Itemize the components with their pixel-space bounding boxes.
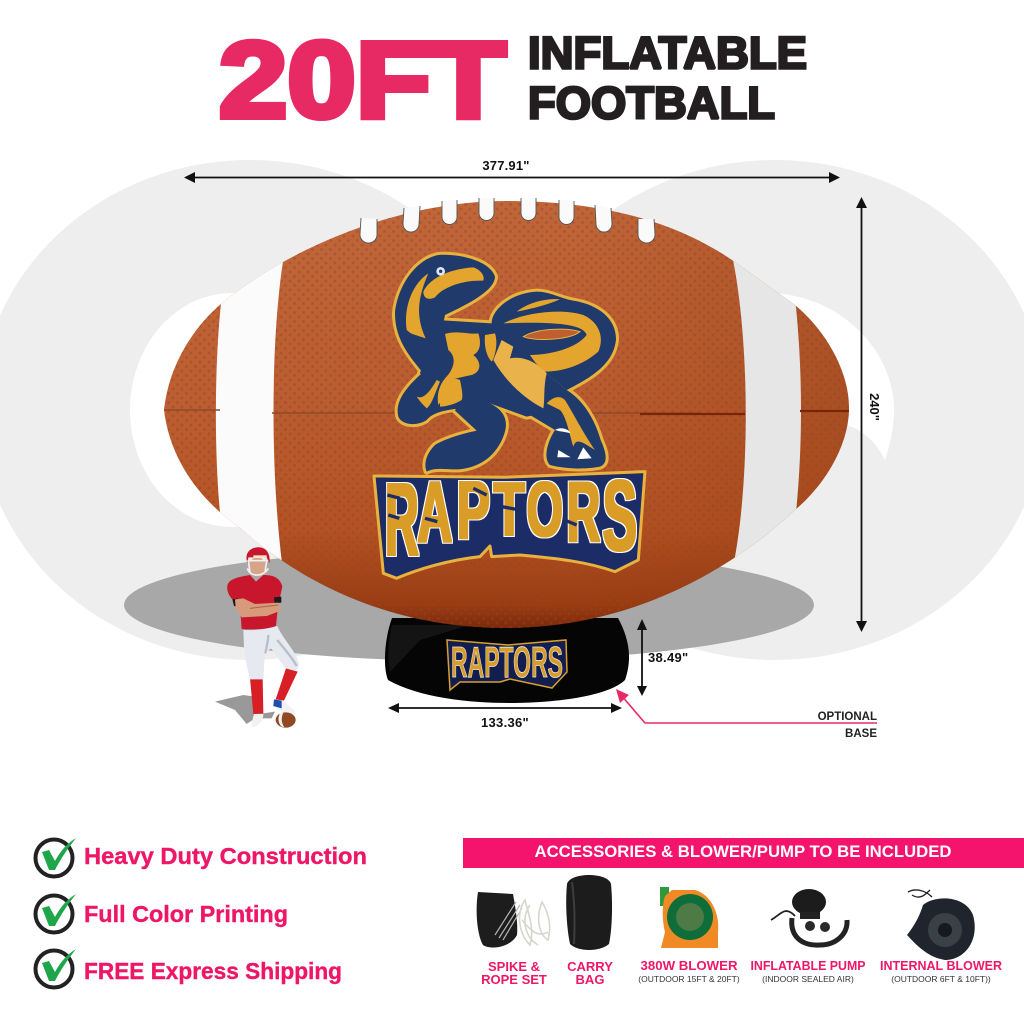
background ghost football [0, 160, 1024, 660]
raptors wordmark badge: R [385, 461, 419, 577]
feature: heavy duty construction [36, 838, 367, 876]
feature: free express shipping [36, 949, 342, 988]
head and helmet [249, 557, 265, 576]
icon: internal blower [907, 890, 975, 960]
player [215, 547, 299, 728]
accessory labels: ROPE SET [481, 972, 547, 987]
raptors wordmark badge: P [457, 466, 490, 556]
raptors wordmark badge: T [493, 467, 525, 551]
jersey [227, 575, 282, 629]
accessory labels: INTERNAL BLOWER [880, 958, 1003, 973]
base height dimension: 38.49" [648, 650, 688, 665]
accessory sublabels [638, 974, 991, 984]
accessories banner [463, 838, 1024, 868]
height dimension: 240" [867, 393, 882, 421]
feature: full color printing: Full Color Printing [84, 901, 288, 927]
accessory labels [481, 958, 1003, 987]
accessory labels: CARRY [567, 959, 613, 974]
optional base callout: OPTIONAL [818, 711, 877, 723]
accessory labels: SPIKE & [488, 959, 540, 974]
title: inflatable football: INFLATABLE [528, 28, 807, 78]
icon: inflatable pump [771, 889, 847, 945]
feature: heavy duty construction: Heavy Duty Construction [84, 843, 367, 869]
title: inflatable football: FOOTBALL [528, 78, 775, 128]
accessories panel [463, 838, 1024, 987]
width dimension: 377.91" [482, 158, 530, 173]
feature list [36, 838, 367, 988]
socks [250, 668, 298, 714]
title: inflatable football [528, 28, 807, 128]
raptors wordmark badge [374, 460, 645, 578]
width dimension [184, 158, 840, 183]
raptors wordmark badge: A [417, 463, 452, 560]
cleats [252, 714, 263, 727]
white band right [732, 255, 801, 562]
base width dimension: 133.36" [481, 715, 529, 730]
raptors wordmark badge: R [567, 465, 600, 560]
arms [235, 598, 281, 617]
accessory labels: INFLATABLE PUMP [750, 958, 866, 973]
football body [150, 190, 860, 640]
laces [360, 198, 655, 243]
optional base callout [616, 689, 877, 740]
base height dimension [637, 619, 688, 696]
white band left [216, 255, 284, 578]
icon: spike and rope set [477, 892, 550, 948]
base logo: RAPTORS [451, 637, 563, 686]
feature: full color printing [36, 894, 288, 932]
accessories banner: ACCESSORIES & BLOWER/PUMP TO BE INCLUDED [534, 842, 952, 861]
optional inflatable base [385, 618, 629, 703]
raptor mascot [395, 255, 616, 472]
accessory sublabels: (INDOOR SEALED AIR) [762, 974, 854, 984]
ground shadow [124, 549, 814, 661]
height dimension [856, 197, 882, 632]
accessory labels: BAG [576, 972, 604, 987]
icon: 380w blower [660, 887, 718, 948]
raptors wordmark badge: S [603, 460, 637, 571]
feature: free express shipping: FREE Express Shipping [84, 958, 342, 984]
icon: carry bag [566, 875, 612, 950]
title [219, 19, 807, 140]
accessory sublabels: (OUTDOOR 15FT & 20FT) [638, 974, 740, 984]
optional base callout: BASE [845, 728, 877, 740]
small football [276, 712, 296, 728]
base width dimension [388, 703, 622, 730]
raptors logo [374, 255, 645, 578]
title: 20FT: 20FT [219, 19, 506, 140]
raptors wordmark badge: O [527, 468, 563, 553]
pants [243, 626, 299, 679]
accessory labels: 380W BLOWER [640, 958, 738, 973]
player shadow [215, 695, 275, 724]
accessory sublabels: (OUTDOOR 6FT & 10FT)) [891, 974, 991, 984]
